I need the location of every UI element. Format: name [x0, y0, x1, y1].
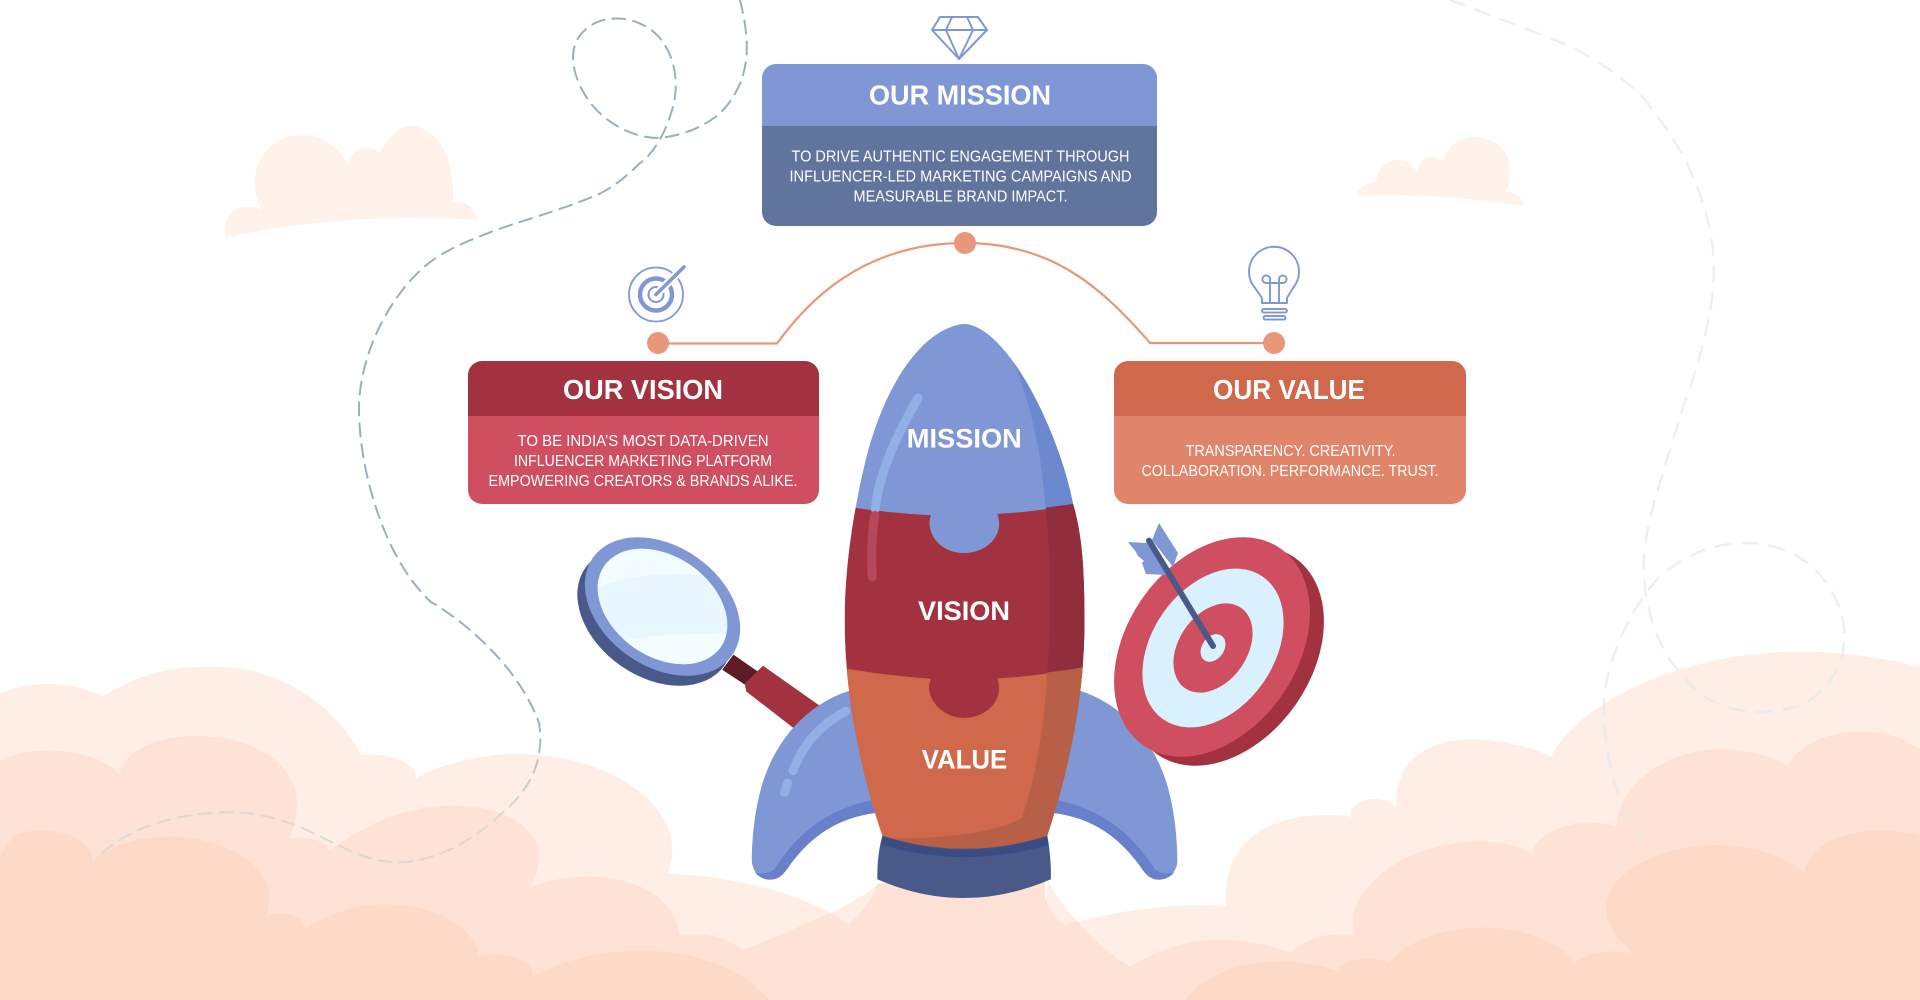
- body shading: blue: [1014, 362, 1074, 509]
- value text: [1142, 443, 1438, 480]
- heading: our vision: OUR VISION: [563, 374, 723, 405]
- vision text: [488, 433, 798, 490]
- arrow shaft: [1149, 541, 1213, 646]
- mission text: [790, 149, 1132, 206]
- plume wedge: right: [1041, 880, 1130, 967]
- value header background: [1114, 361, 1466, 416]
- mission text: INFLUENCER-LED MARKETING CAMPAIGNS AND: [790, 169, 1132, 186]
- body section: value (orange): [846, 667, 1083, 849]
- connector line: [658, 243, 1274, 344]
- body shading: orange: [890, 668, 1083, 849]
- connector: arc linking the three cards: [647, 232, 1285, 354]
- dartboard inner ring: [1157, 588, 1269, 708]
- dashed flight path: left: [98, 0, 747, 862]
- magnifier handle: [722, 655, 830, 737]
- body highlight: blue part: [875, 398, 918, 509]
- panel: our mission: [762, 64, 1157, 226]
- icon: light bulb: [1249, 247, 1299, 320]
- body shading: red: [1046, 504, 1084, 674]
- icon: target: [629, 267, 684, 322]
- vision text: EMPOWERING CREATORS & BRANDS ALIKE.: [488, 473, 798, 490]
- vision text: INFLUENCER MARKETING PLATFORM: [514, 453, 772, 470]
- vision header background: [468, 361, 819, 416]
- dartboard light ring: [1113, 542, 1313, 754]
- body highlight: red part: [872, 515, 875, 577]
- panel: our value: [1114, 361, 1466, 504]
- icon: magnifying glass: [577, 537, 819, 728]
- ground clouds: [0, 652, 1920, 1000]
- connector node: mission: [954, 232, 976, 254]
- connector node: vision: [647, 332, 669, 354]
- magnifier back rim: [551, 519, 759, 714]
- icon: diamond: [932, 17, 987, 59]
- small cloud: upper right: [1356, 137, 1524, 206]
- heading: our value: OUR VALUE: [1213, 374, 1365, 405]
- cloud layer: deepest left: [0, 831, 771, 1000]
- cloud layer: lightest: [0, 652, 1920, 1000]
- rocket label: value: VALUE: [922, 744, 1007, 774]
- illustration: dartboard with arrow: [1074, 500, 1364, 803]
- cloud layer: middle: [0, 732, 1920, 1000]
- dartboard bullseye: [1195, 629, 1231, 667]
- rocket: [752, 316, 1177, 898]
- arrow feathers: [1128, 523, 1178, 575]
- mission text: MEASURABLE BRAND IMPACT.: [854, 189, 1068, 206]
- value text: COLLABORATION. PERFORMANCE. TRUST.: [1142, 463, 1438, 480]
- mission header background: [762, 64, 1157, 126]
- mission text: TO DRIVE AUTHENTIC ENGAGEMENT THROUGH: [792, 149, 1130, 166]
- cloud layer: deepest right: [1183, 831, 1920, 1000]
- rocket fin: left: [752, 689, 876, 880]
- plume wedge: left: [742, 883, 882, 967]
- panel: our vision: [468, 361, 819, 504]
- rocket label: vision: VISION: [918, 596, 1010, 626]
- rocket label: mission: MISSION: [907, 424, 1022, 454]
- magnifier lens: [598, 548, 728, 664]
- dashed flight path: right: [1450, 0, 1844, 850]
- heading: our mission: OUR MISSION: [869, 80, 1051, 110]
- body section: vision (red): [836, 502, 1091, 735]
- small cloud: upper left: [225, 126, 478, 238]
- body section: mission (blue): [847, 324, 1084, 569]
- connector node: value: [1263, 332, 1285, 354]
- rocket fin: right: [1053, 689, 1177, 880]
- rocket body: [836, 316, 1091, 861]
- vision text: TO BE INDIA’S MOST DATA-DRIVEN: [518, 433, 768, 450]
- vision body background: [468, 416, 819, 504]
- value text: TRANSPARENCY. CREATIVITY.: [1186, 443, 1396, 460]
- dartboard shell: [1088, 509, 1364, 803]
- value body background: [1114, 416, 1466, 504]
- dartboard outer ring: [1074, 500, 1350, 794]
- mission body background: [762, 126, 1157, 226]
- magnifier rim: [558, 509, 767, 704]
- rocket nozzle: [877, 836, 1051, 898]
